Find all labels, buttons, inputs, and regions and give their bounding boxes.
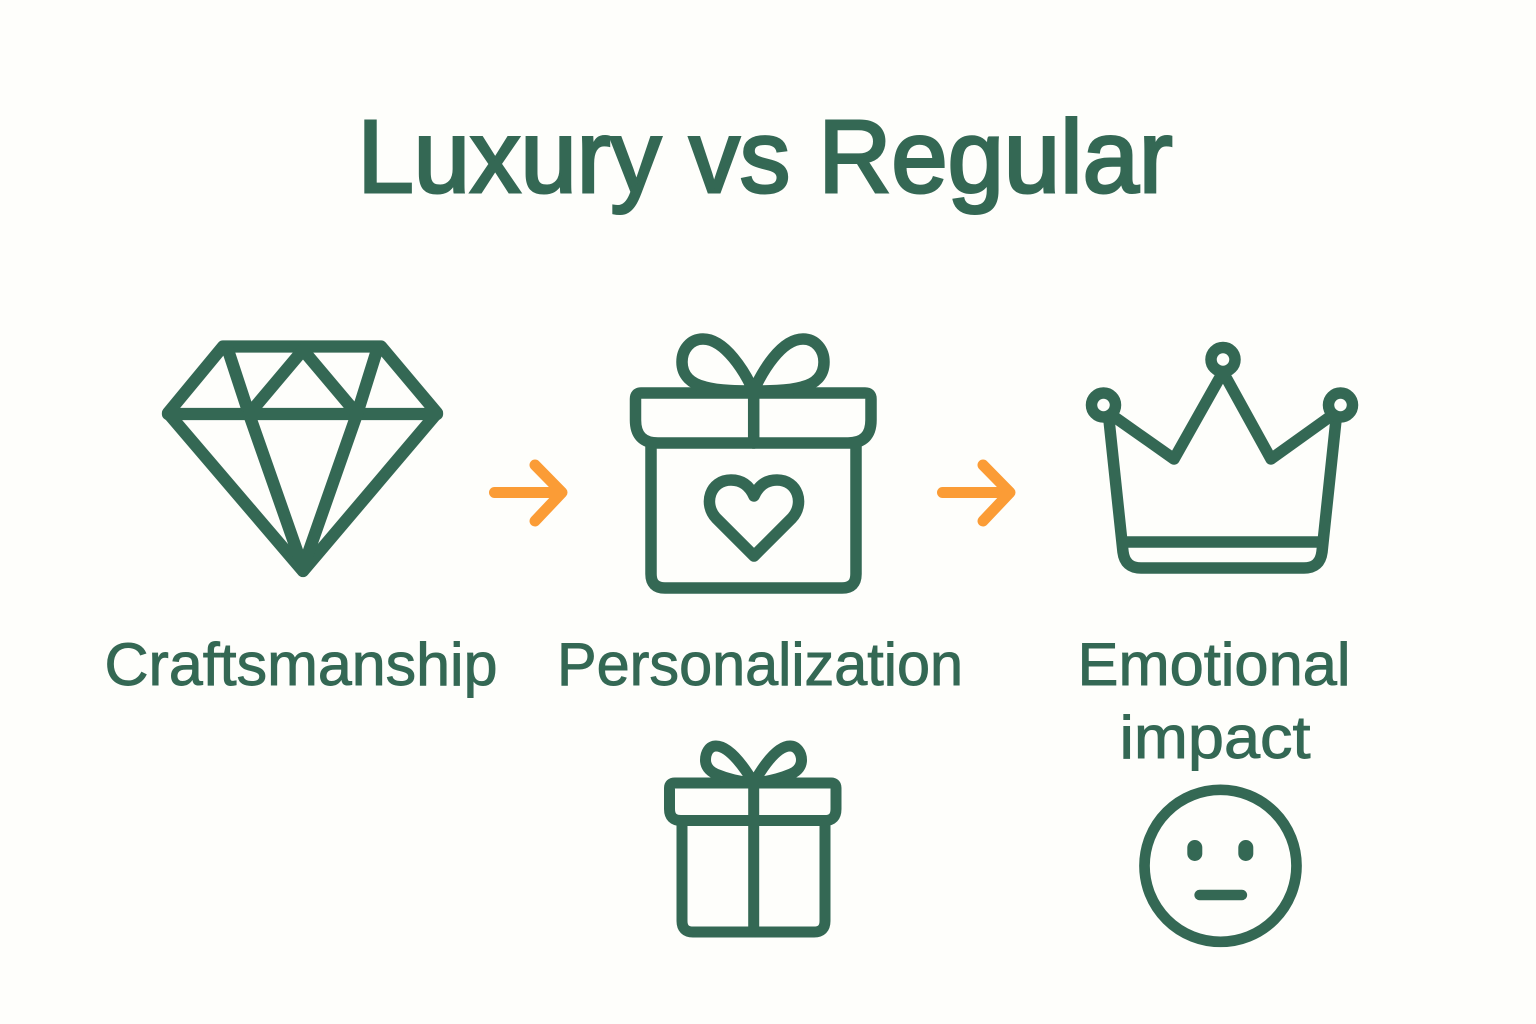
arrow: personalization to emotional impact: [942, 465, 1010, 521]
arrow: craftsmanship to personalization: [494, 465, 562, 521]
icon: gift box with heart: [636, 339, 871, 588]
label: personalization: Personalization: [557, 631, 963, 698]
icon: diamond: [168, 346, 437, 571]
icon: crown: [1092, 348, 1352, 568]
label: craftsmanship: Craftsmanship: [104, 631, 498, 698]
label: emotional impact: Emotional: [1078, 631, 1350, 698]
icon: plain gift box: [670, 746, 836, 932]
icon: neutral face: [1144, 790, 1296, 942]
title: Luxury vs Regular: [358, 99, 1172, 214]
label: emotional impact: [1078, 631, 1350, 771]
label: emotional impact: impact: [1120, 704, 1311, 771]
